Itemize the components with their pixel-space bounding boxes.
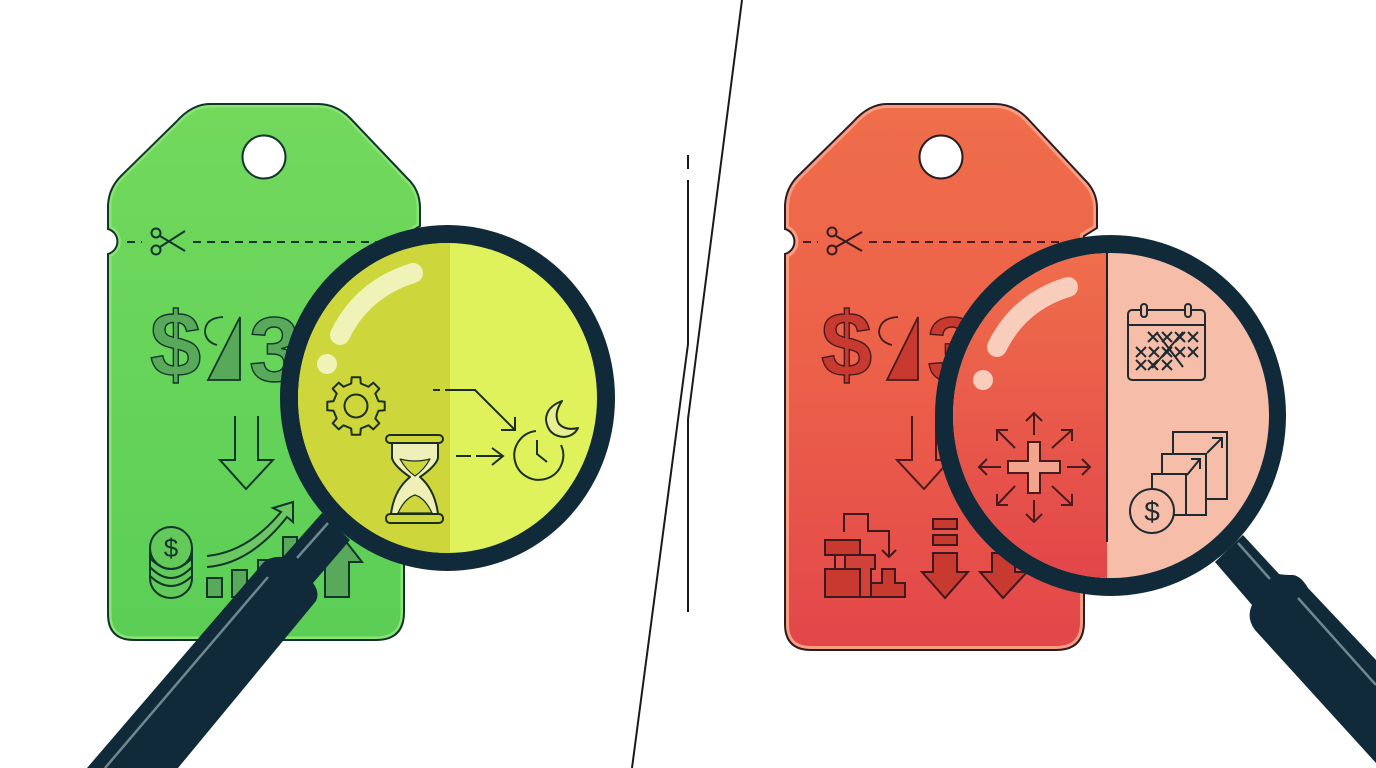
handle body <box>87 513 350 768</box>
panel: red price tag <box>785 104 1097 650</box>
price digit: three: 3 <box>927 299 978 401</box>
price digit fragment: arc <box>205 317 223 345</box>
glass highlight dot <box>973 370 993 390</box>
price digit fragment: triangle <box>208 317 240 380</box>
handle body <box>1215 535 1376 763</box>
magnifier lens: red side <box>935 235 1286 596</box>
arrow: upper bent dashed arrow <box>433 390 515 430</box>
price digit fragment: arc <box>879 317 898 345</box>
glass highlight arc <box>340 273 413 335</box>
price digit: three: 3 <box>249 299 300 401</box>
icon: coin stack: $ <box>164 533 179 563</box>
icon: scissors <box>152 228 185 254</box>
magnifier handle: red side <box>1215 535 1376 763</box>
icon: calendar with crossed-out days <box>1128 304 1205 380</box>
icon: growing boxes with dollar coin <box>1130 432 1227 533</box>
perforation dashed line <box>127 241 385 243</box>
icon: scissors <box>828 228 862 254</box>
green tag body <box>108 104 420 640</box>
panel: green price tag <box>108 104 420 640</box>
icon: growing boxes with dollar coin: $ <box>1144 496 1160 527</box>
green tag light rim <box>108 104 420 640</box>
lens left half <box>290 240 450 560</box>
magnifier handle: green side <box>87 513 350 768</box>
icon: curved growth arrow <box>207 502 293 567</box>
arrow: lower dashed arrow <box>456 448 503 465</box>
red tag light rim <box>785 104 1097 650</box>
icon: collapsing blocks with arrow <box>825 514 905 597</box>
price digits: dollar sign: $ <box>821 294 872 396</box>
price digits: dollar sign: $ <box>150 294 201 396</box>
perforation dashed line <box>803 241 1065 243</box>
lens right half <box>298 243 597 553</box>
green tag outline <box>108 104 420 640</box>
glass highlight arc <box>997 287 1068 347</box>
icon: outlined down arrow <box>220 416 273 489</box>
price digit fragment: triangle <box>887 317 918 380</box>
icon: plus with radiating arrows <box>979 413 1090 522</box>
divider line: slanted split with vertical segments <box>632 0 742 768</box>
icon: second down arrow <box>980 553 1027 598</box>
red tag body <box>785 104 1097 650</box>
lens ring <box>280 225 615 571</box>
glass highlight dot <box>317 354 337 374</box>
icon: growth bars <box>207 537 297 597</box>
lens ring <box>935 235 1286 596</box>
magnifier lens: green side <box>280 225 615 571</box>
lens dividing line <box>1106 253 1108 542</box>
icon: hourglass <box>386 435 443 523</box>
icon: coin stack <box>150 527 192 598</box>
tag hole <box>920 136 962 178</box>
tag hole <box>242 136 286 178</box>
icon: down arrow with bars <box>922 519 968 598</box>
red tag outline <box>785 104 1097 650</box>
icon: outlined down arrow <box>897 416 950 489</box>
lens right half <box>953 253 1269 578</box>
icon: gear <box>327 377 385 435</box>
icon: moon <box>546 401 578 437</box>
lens left half <box>945 250 1107 582</box>
icon: clock <box>514 431 563 480</box>
icon: up arrow <box>312 530 362 597</box>
handle highlights <box>1238 543 1376 685</box>
handle highlights <box>105 523 328 768</box>
